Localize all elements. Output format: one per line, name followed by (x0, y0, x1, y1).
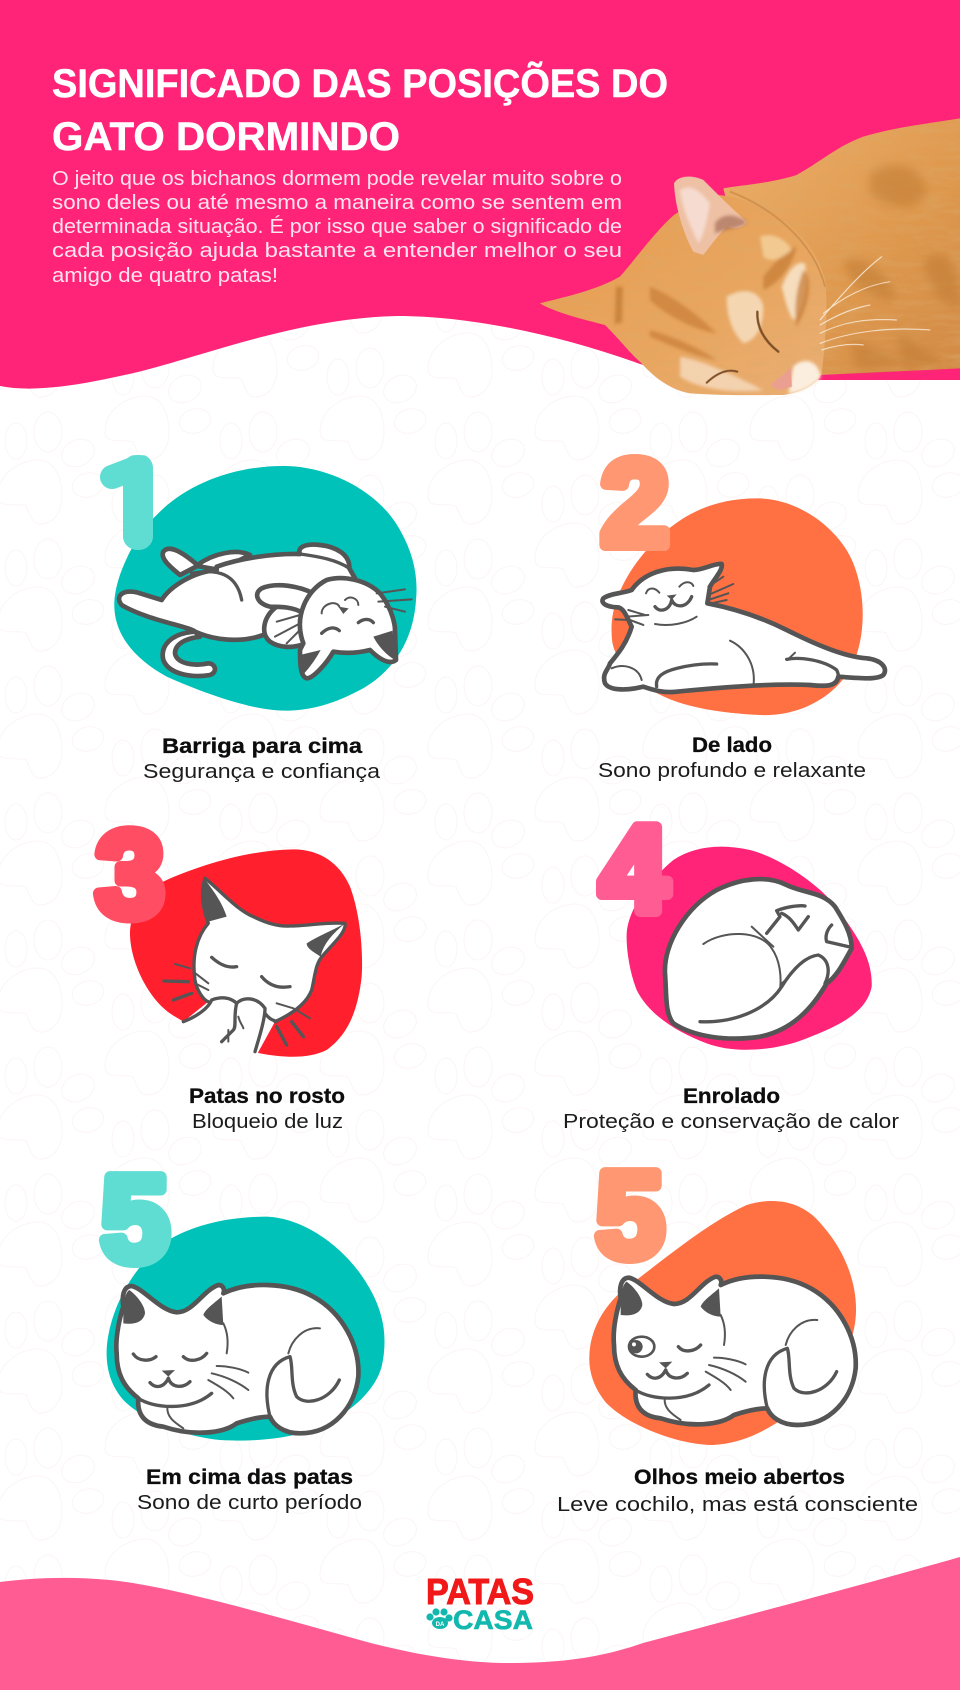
caption 1: Segurança e confiança (143, 761, 381, 783)
caption 5: Sono de curto período (137, 1492, 362, 1514)
cat sleeping on its paws (116, 1285, 358, 1433)
number 1: 1 (104, 435, 172, 571)
logo (426, 1571, 534, 1635)
title (52, 60, 668, 159)
photo: sleeping orange cat (540, 118, 960, 395)
cat lying on its side (602, 564, 885, 692)
number 5: 5 (596, 1147, 664, 1283)
caption 1 (143, 735, 381, 783)
header background wave (0, 0, 960, 389)
cat lying on its back (119, 545, 412, 678)
caption 5: Em cima das patas (146, 1466, 353, 1489)
title: GATO DORMINDO (52, 115, 400, 159)
caption 2: Sono profundo e relaxante (598, 760, 866, 782)
cat with one eye open (614, 1277, 856, 1425)
caption 3: Patas no rosto (189, 1085, 345, 1108)
caption 5 (137, 1466, 362, 1514)
blob 5 (107, 1217, 385, 1441)
number 1 (100, 455, 153, 550)
panel: em cima das patas (101, 1151, 385, 1514)
number 4: 4 (600, 801, 668, 937)
intro paragraph: cada posição ajuda bastante a entender melhor o seu (52, 240, 622, 262)
number 5: 5 (101, 1151, 169, 1287)
intro paragraph: determinada situação. É por isso que saber o significado de (52, 215, 622, 238)
icon: paw: DA (436, 1622, 445, 1628)
caption 4 (563, 1085, 899, 1133)
blob 4 (627, 847, 872, 1050)
caption 6 (557, 1466, 918, 1516)
intro paragraph: amigo de quatro patas! (52, 265, 278, 287)
caption 2 (598, 734, 866, 782)
blob 3 (130, 849, 362, 1057)
blob 6 (589, 1201, 856, 1445)
footer wave (0, 1557, 960, 1690)
caption 3: Bloqueio de luz (192, 1111, 343, 1133)
caption 2: De lado (692, 734, 772, 757)
intro paragraph: sono deles ou até mesmo a maneira como se sentem em (52, 192, 622, 214)
caption 4: Enrolado (683, 1085, 780, 1108)
title: SIGNIFICADO DAS POSIÇÕES DO (52, 60, 668, 106)
panel: barriga para cima (104, 435, 417, 783)
caption 6: Olhos meio abertos (634, 1466, 845, 1489)
blob 1 (114, 466, 417, 711)
logo: PATAS (426, 1571, 534, 1612)
panel: olhos meio abertos (557, 1147, 918, 1516)
number 3: 3 (96, 806, 164, 942)
caption 4: Proteção e conservação de calor (563, 1111, 899, 1133)
caption 6: Leve cochilo, mas está consciente (557, 1494, 918, 1516)
logo: CASA (453, 1605, 533, 1635)
panel: enrolado (563, 801, 899, 1133)
cat with paws on face (164, 878, 345, 1055)
curled up cat (665, 879, 852, 1039)
panel: de lado (598, 435, 885, 782)
intro paragraph: O jeito que os bichanos dormem pode revelar muito sobre o (52, 168, 622, 190)
intro paragraph (52, 168, 622, 287)
number 2: 2 (601, 435, 669, 571)
caption 1: Barriga para cima (162, 735, 362, 758)
blob 2 (612, 498, 863, 715)
panel: patas no rosto (96, 806, 362, 1133)
caption 3 (189, 1085, 345, 1133)
